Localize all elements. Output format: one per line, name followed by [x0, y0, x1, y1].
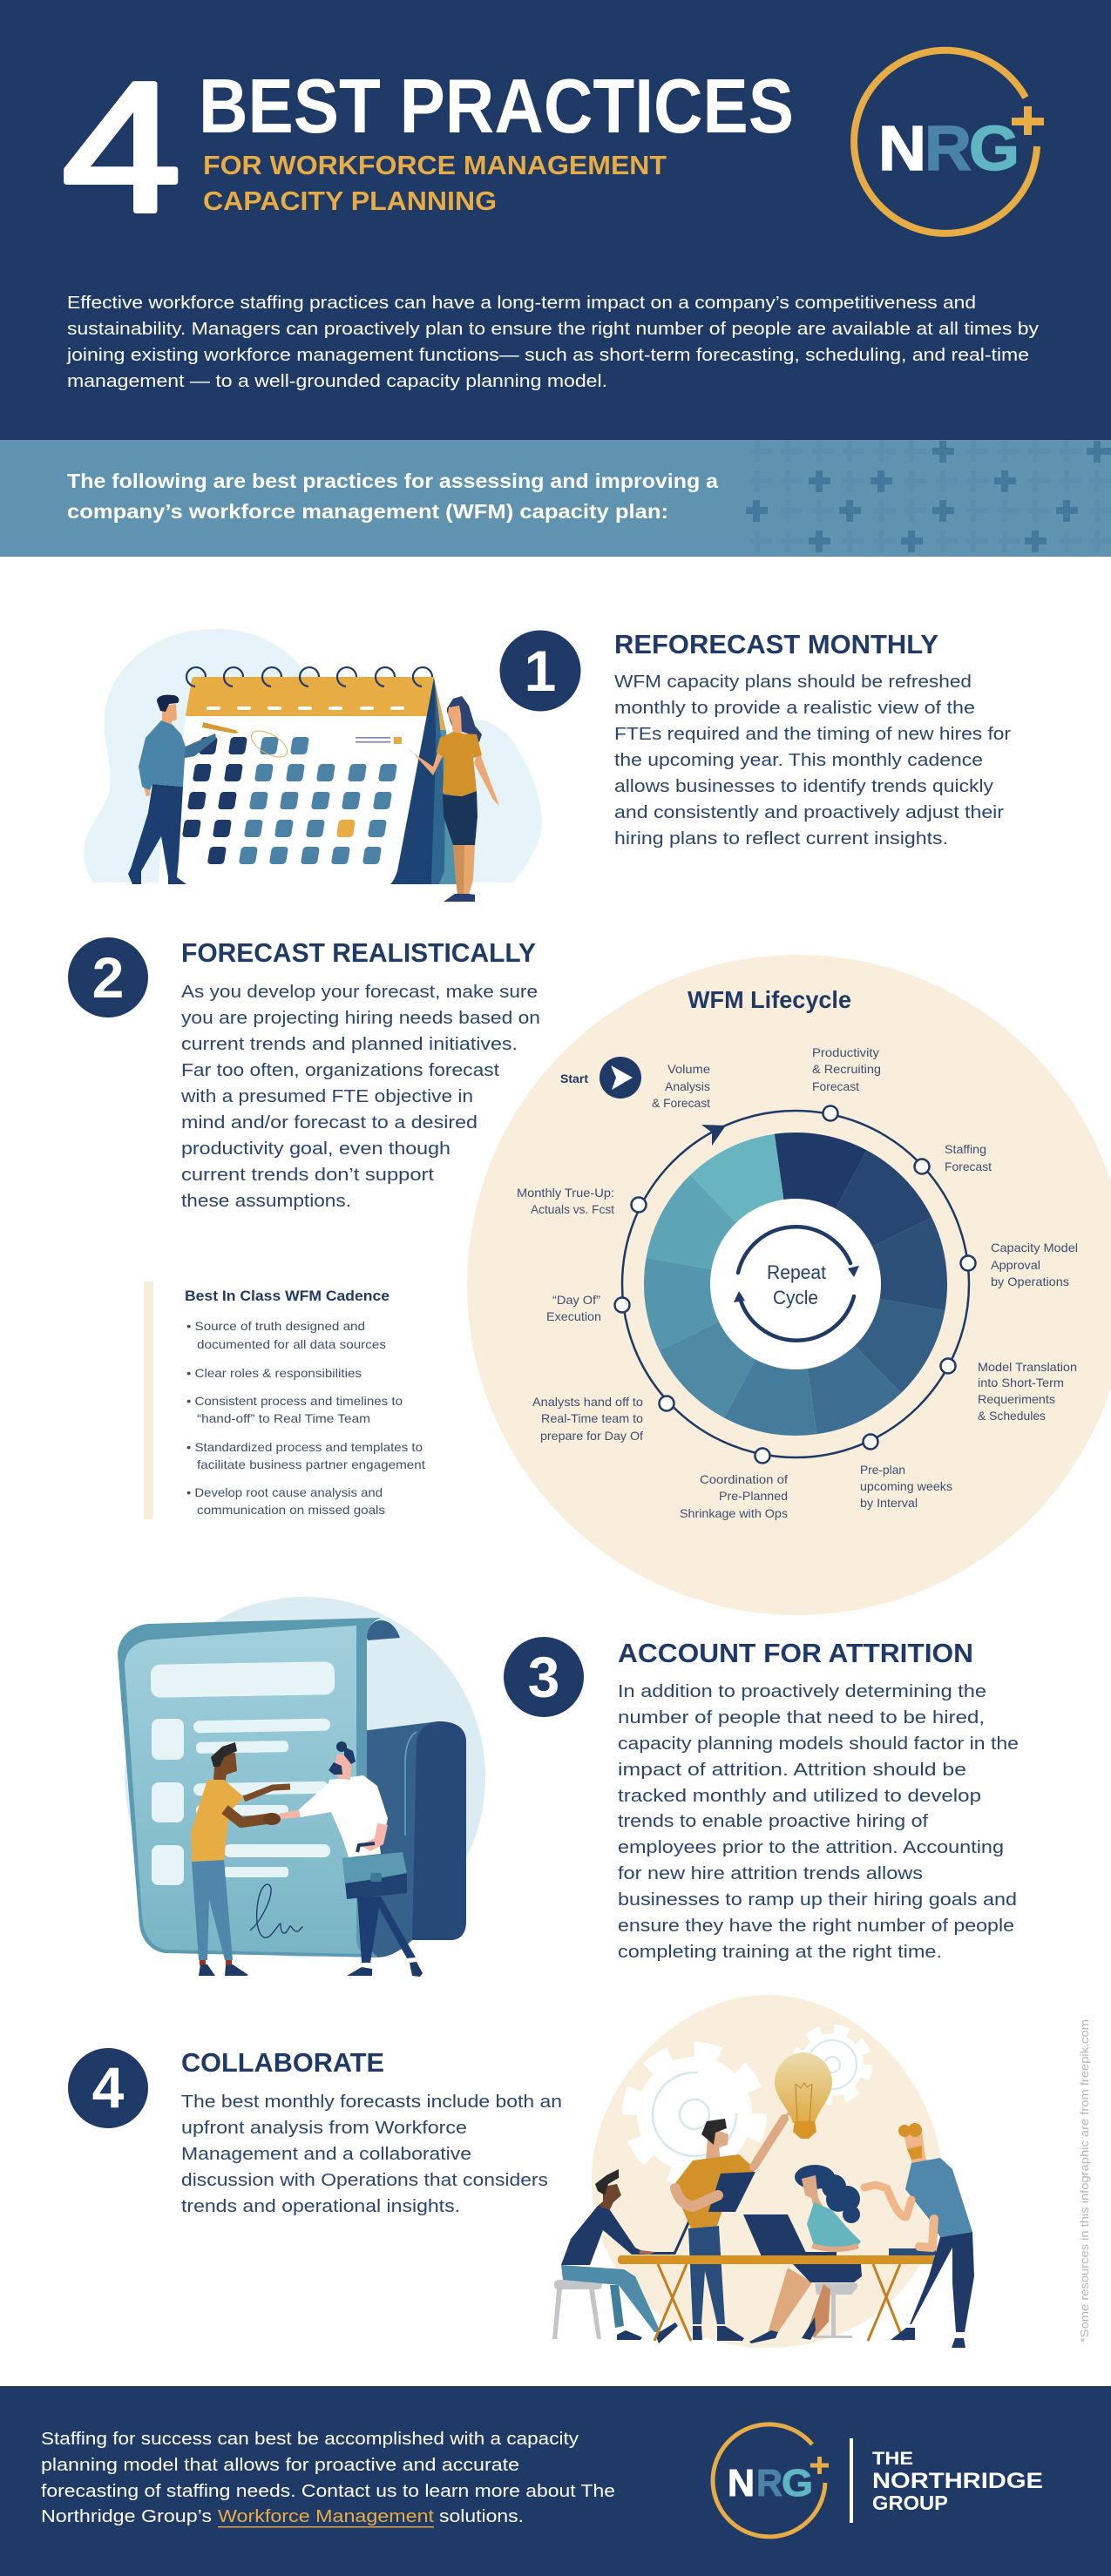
- logo divider: [850, 2438, 853, 2523]
- label: analysts hand off: [532, 1395, 643, 1443]
- calendar rings: [186, 667, 432, 686]
- body text: trends to enable proactive hiring of: [618, 1811, 928, 1831]
- body text: with a presumed FTE objective in: [180, 1086, 473, 1106]
- arrow on ring: [701, 1125, 726, 1146]
- panel: WFM lifecycle diagram: [467, 955, 1111, 1615]
- lifecycle step labels: [517, 1045, 1078, 1520]
- heading: FORECAST REALISTICALLY: [181, 937, 536, 968]
- body text: and consistently and proactively adjust their: [614, 802, 1004, 822]
- cadence bullet list: • Clear roles & responsibilities: [186, 1366, 362, 1380]
- logo: NRG+ small: N: [728, 2462, 755, 2505]
- company name: NORTHRIDGE: [872, 2469, 1043, 2493]
- footer text: solutions.: [439, 2506, 524, 2526]
- body text: FTEs required and the timing of new hires for: [614, 724, 1011, 744]
- intro text: sustainability. Managers can proactively plan to ensure the right number of people are available at all times by: [67, 319, 1040, 339]
- header panel: [0, 0, 1111, 440]
- label: staffing forecast: [945, 1142, 992, 1173]
- body text: capacity planning models should factor in the: [618, 1734, 1019, 1754]
- body text: these assumptions.: [181, 1191, 351, 1211]
- label: pre-plan: upcoming weeks: [860, 1479, 952, 1493]
- title: big number 4: 4: [62, 44, 181, 250]
- cadence bullet list: • Source of truth designed and: [186, 1319, 365, 1333]
- band text: [67, 470, 718, 523]
- label: volume analysis: [652, 1062, 710, 1110]
- company name: THE: [872, 2449, 913, 2469]
- label: capacity model approval: Capacity Model: [991, 1241, 1078, 1254]
- number badge 3: [504, 1637, 584, 1717]
- company name: [872, 2449, 1043, 2514]
- section 2: forecast realistically: [68, 937, 1111, 1615]
- body text: hiring plans to reflect current insights.: [614, 828, 948, 849]
- calendar binding dashes: [207, 707, 404, 710]
- cadence bullet list: documented for all data sources: [197, 1337, 386, 1351]
- band text: The following are best practices for assessing and improving a: [67, 470, 718, 492]
- label: volume analysis: Volume: [667, 1062, 710, 1076]
- logo: NRG+: R: [925, 114, 972, 184]
- intro text: joining existing workforce management functions— such as short-term forecasting, scheduling, and real-time: [66, 345, 1029, 365]
- number badge 4: 4: [92, 2055, 125, 2120]
- label: capacity model approval: by Operations: [991, 1274, 1069, 1288]
- man in yellow shirt: [191, 1742, 290, 1976]
- intro text: [66, 293, 1040, 391]
- label: productivity: & Recruiting: [812, 1062, 881, 1076]
- label: staffing forecast: Staffing: [945, 1142, 986, 1156]
- table: [618, 2255, 936, 2341]
- heading: ACCOUNT FOR ATTRITION: [618, 1638, 973, 1668]
- illustration: contract and handshake: [118, 1597, 485, 1977]
- label: coordination: Shrinkage with Ops: [680, 1506, 788, 1520]
- diagram title: WFM Lifecycle: [688, 986, 851, 1013]
- standing man with beard: [864, 2123, 974, 2348]
- label: productivity: [812, 1045, 881, 1093]
- repeat cycle center: [734, 1227, 859, 1341]
- body text: discussion with Operations that considers: [181, 2170, 548, 2190]
- label: monthly true-up: Monthly True-Up:: [517, 1186, 614, 1200]
- circled day: [247, 726, 291, 762]
- label: capacity model approval: [991, 1241, 1078, 1288]
- body text: current trends and planned initiatives.: [181, 1034, 518, 1054]
- label: pre-plan: by Interval: [860, 1496, 918, 1510]
- calendar note: [356, 737, 402, 744]
- label: model translation: [978, 1360, 1077, 1423]
- label: volume analysis: Analysis: [665, 1079, 710, 1093]
- intro text: management — to a well-grounded capacity planning model.: [67, 371, 607, 391]
- subtitle: FOR WORKFORCE MANAGEMENT: [203, 150, 667, 180]
- number badge 1: 1: [525, 639, 556, 703]
- body text: businesses to ramp up their hiring goals and: [618, 1890, 1017, 1910]
- signature: [250, 1884, 303, 1937]
- image credit: *Some resources in this infographic are from freepik.com: [1078, 2019, 1091, 2343]
- label: model translation: & Schedules: [978, 1409, 1046, 1423]
- panel: best in class WFM cadence: [144, 1281, 425, 1519]
- logo: NRG+ small: G: [782, 2462, 813, 2505]
- label: monthly true-up: [517, 1186, 614, 1216]
- label: model translation: Requeriments: [978, 1392, 1055, 1406]
- body text: As you develop your forecast, make sure: [181, 982, 538, 1002]
- title: best practices: BEST PRACTICES: [199, 63, 794, 149]
- label: analysts hand off: Real-Time team to: [541, 1411, 643, 1425]
- number badge 4: [68, 2048, 148, 2128]
- label: day of execution: “Day Of”: [552, 1293, 600, 1307]
- subtitle: CAPACITY PLANNING: [203, 186, 497, 216]
- section 1: reforecast monthly: [84, 629, 1011, 902]
- calendar day cells: [182, 737, 397, 864]
- label: day of execution: [546, 1293, 601, 1323]
- woman: [408, 696, 499, 902]
- logo: NRG+ small: [713, 2424, 829, 2537]
- number badge 3: 3: [528, 1645, 559, 1709]
- number badge 2: [68, 937, 148, 1018]
- body text: for new hire attrition trends allows: [618, 1863, 923, 1883]
- label: pre-plan: Pre-plan: [860, 1463, 905, 1477]
- label: analysts hand off: Analysts hand off to: [532, 1395, 643, 1409]
- body text: monthly to provide a realistic view of the: [614, 698, 975, 718]
- repeat cycle center: Cycle: [773, 1287, 818, 1308]
- body text: the upcoming year. This monthly cadence: [614, 750, 983, 770]
- label: monthly true-up: Actuals vs. Fcst: [531, 1202, 614, 1216]
- label: productivity: Forecast: [812, 1079, 859, 1093]
- label: model translation: Model Translation: [978, 1360, 1077, 1374]
- number badge 2: 2: [92, 945, 124, 1010]
- cadence bullet list: facilitate business partner engagement: [197, 1457, 425, 1471]
- footer text: Workforce Management: [218, 2506, 434, 2526]
- body text: upfront analysis from Workforce: [181, 2118, 467, 2138]
- subtitle: [203, 150, 667, 216]
- footer text: Northridge Group’s: [41, 2506, 212, 2526]
- repeat cycle center: Repeat: [767, 1261, 826, 1283]
- label: day of execution: Execution: [546, 1309, 601, 1323]
- woman with laptop: [743, 2165, 862, 2343]
- heading: COLLABORATE: [181, 2047, 384, 2078]
- footer text: Staffing for success can best be accomplished with a capacity: [41, 2429, 579, 2449]
- body text: current trends don’t support: [181, 1165, 434, 1185]
- body text: impact of attrition. Attrition should be: [618, 1760, 966, 1780]
- label: analysts hand off: prepare for Day Of: [540, 1429, 643, 1443]
- footer text: [41, 2429, 615, 2527]
- body text: completing training at the right time.: [618, 1942, 942, 1962]
- body text: Management and a collaborative: [181, 2144, 471, 2164]
- cadence bullet list: • Develop root cause analysis and: [186, 1485, 383, 1499]
- body text: WFM capacity plans should be refreshed: [614, 672, 972, 692]
- body text: trends and operational insights.: [181, 2196, 460, 2216]
- illustration: team meeting with light bulb: [552, 1995, 974, 2348]
- label: coordination: Pre-Planned: [719, 1489, 788, 1503]
- cadence bullet list: • Consistent process and timelines to: [186, 1394, 403, 1408]
- rolled paper: [362, 1721, 466, 1957]
- body text: [614, 672, 1011, 849]
- sitting man with laptop: [552, 2169, 691, 2343]
- intro band: [0, 440, 1111, 557]
- logo: NRG+ small: R: [756, 2462, 782, 2505]
- footer text: forecasting of staffing needs. Contact us to learn more about The: [41, 2481, 615, 2501]
- label: staffing forecast: Forecast: [945, 1160, 992, 1173]
- calendar fold: [390, 678, 457, 884]
- footer text: planning model that allows for proactive and accurate: [41, 2455, 519, 2475]
- illustration: calendar with two people: [84, 629, 542, 902]
- label: pre-plan: [860, 1463, 952, 1510]
- number badge 1: [500, 631, 580, 711]
- label: model translation: into Short-Term: [978, 1376, 1064, 1389]
- contract lines: [151, 1661, 335, 1885]
- body text: The best monthly forecasts include both an: [181, 2092, 562, 2112]
- heading: REFORECAST MONTHLY: [614, 629, 938, 659]
- body text: employees prior to the attrition. Accounting: [618, 1837, 1004, 1857]
- gears: [630, 2029, 868, 2179]
- company name: GROUP: [872, 2491, 948, 2514]
- label: capacity model approval: Approval: [991, 1258, 1040, 1272]
- cadence heading: Best In Class WFM Cadence: [185, 1288, 390, 1304]
- section 3: account for attrition: [118, 1597, 1019, 1977]
- body text: In addition to proactively determining the: [618, 1681, 986, 1701]
- man with pencil: [128, 695, 239, 884]
- body text: tracked monthly and utilized to develop: [618, 1786, 981, 1806]
- footer panel: [0, 2386, 1111, 2576]
- body text: [180, 982, 540, 1211]
- logo: NRG+: N: [878, 114, 926, 184]
- cadence bullet list: [186, 1319, 425, 1517]
- wheel wedges: [644, 1132, 947, 1436]
- cadence bullet list: communication on missed goals: [197, 1503, 385, 1517]
- body text: ensure they have the right number of people: [618, 1916, 1014, 1936]
- label: volume analysis: & Forecast: [652, 1096, 710, 1110]
- logo: NRG+: G: [969, 114, 1020, 184]
- label: productivity: Productivity: [812, 1045, 879, 1059]
- band text: company’s workforce management (WFM) capacity plan:: [67, 500, 668, 523]
- section 4: collaborate: [68, 1995, 1091, 2348]
- body text: [618, 1681, 1019, 1962]
- cadence bullet list: “hand-off” to Real Time Team: [197, 1411, 370, 1425]
- outer ring with milestones: [615, 1106, 976, 1464]
- light bulb: [775, 2052, 832, 2139]
- body text: allows businesses to identify trends quickly: [614, 776, 994, 796]
- body text: productivity goal, even though: [181, 1139, 450, 1159]
- standing man pointing at bulb: [673, 2111, 790, 2341]
- logo: NRG+: [854, 51, 1044, 233]
- body text: [181, 2092, 562, 2216]
- woman hair: [795, 2165, 860, 2223]
- label: coordination: [680, 1472, 788, 1520]
- body text: mind and/or forecast to a desired: [181, 1112, 478, 1132]
- contract page: [118, 1618, 400, 1957]
- body text: number of people that need to be hired,: [618, 1707, 985, 1727]
- body text: you are projecting hiring needs based on: [181, 1008, 540, 1028]
- start badge: [560, 1057, 641, 1099]
- cadence bullet list: • Standardized process and templates to: [186, 1440, 423, 1454]
- body text: Far too often, organizations forecast: [181, 1060, 499, 1080]
- man with briefcase: [279, 1741, 423, 1977]
- start badge: Start: [560, 1072, 588, 1085]
- intro text: Effective workforce staffing practices can have a long-term impact on a company’s competitiveness and: [67, 293, 976, 313]
- label: coordination: Coordination of: [700, 1472, 788, 1486]
